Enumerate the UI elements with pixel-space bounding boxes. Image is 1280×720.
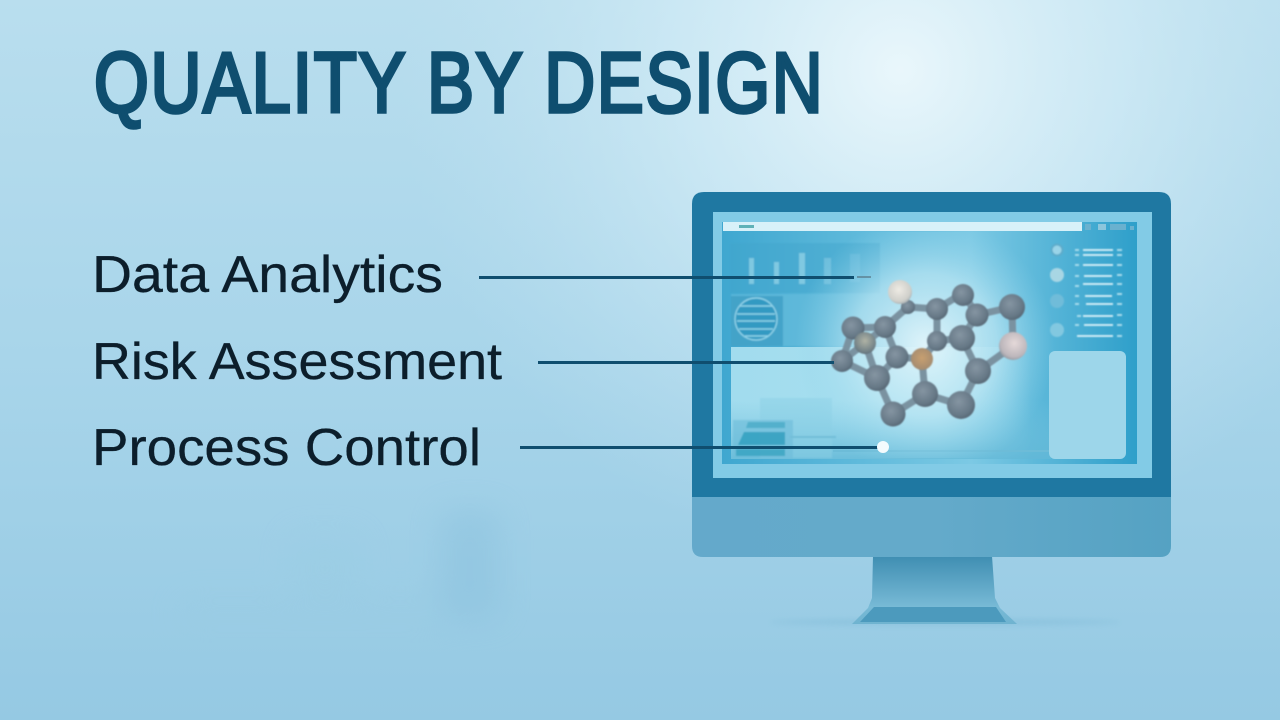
label: Data Analytics: Data Analytics: [92, 246, 443, 304]
leader line: Risk Assessment: [538, 361, 834, 364]
stepped chart panel: [733, 398, 836, 458]
monitor: [692, 192, 1171, 625]
progress track: [833, 450, 1053, 452]
dashboard chart panel: [730, 243, 880, 293]
right data card: [1049, 351, 1126, 459]
blurred background silhouette: [180, 510, 500, 630]
screen glow: [790, 232, 1060, 458]
leader line: Process Control: [520, 441, 889, 453]
molecule: [831, 280, 1027, 426]
monitor chin: [692, 490, 1171, 557]
circular gauge panel: [731, 294, 881, 346]
molecule atoms: [831, 280, 1027, 426]
molecule bonds: [842, 292, 1013, 414]
top bar: [723, 222, 1134, 231]
label: Process Control: Process Control: [92, 419, 481, 477]
status circles: [1050, 244, 1064, 337]
title: QUALITY BY DESIGN: [94, 35, 823, 130]
leader line: Data Analytics: [479, 276, 871, 279]
label: Risk Assessment: Risk Assessment: [92, 333, 503, 391]
large lower panel: [731, 347, 1051, 459]
monitor stand: [770, 556, 1120, 625]
monitor bezel: [692, 192, 1171, 497]
screen frame: [713, 212, 1152, 478]
data list: [1075, 250, 1122, 336]
screen display: [722, 222, 1137, 464]
